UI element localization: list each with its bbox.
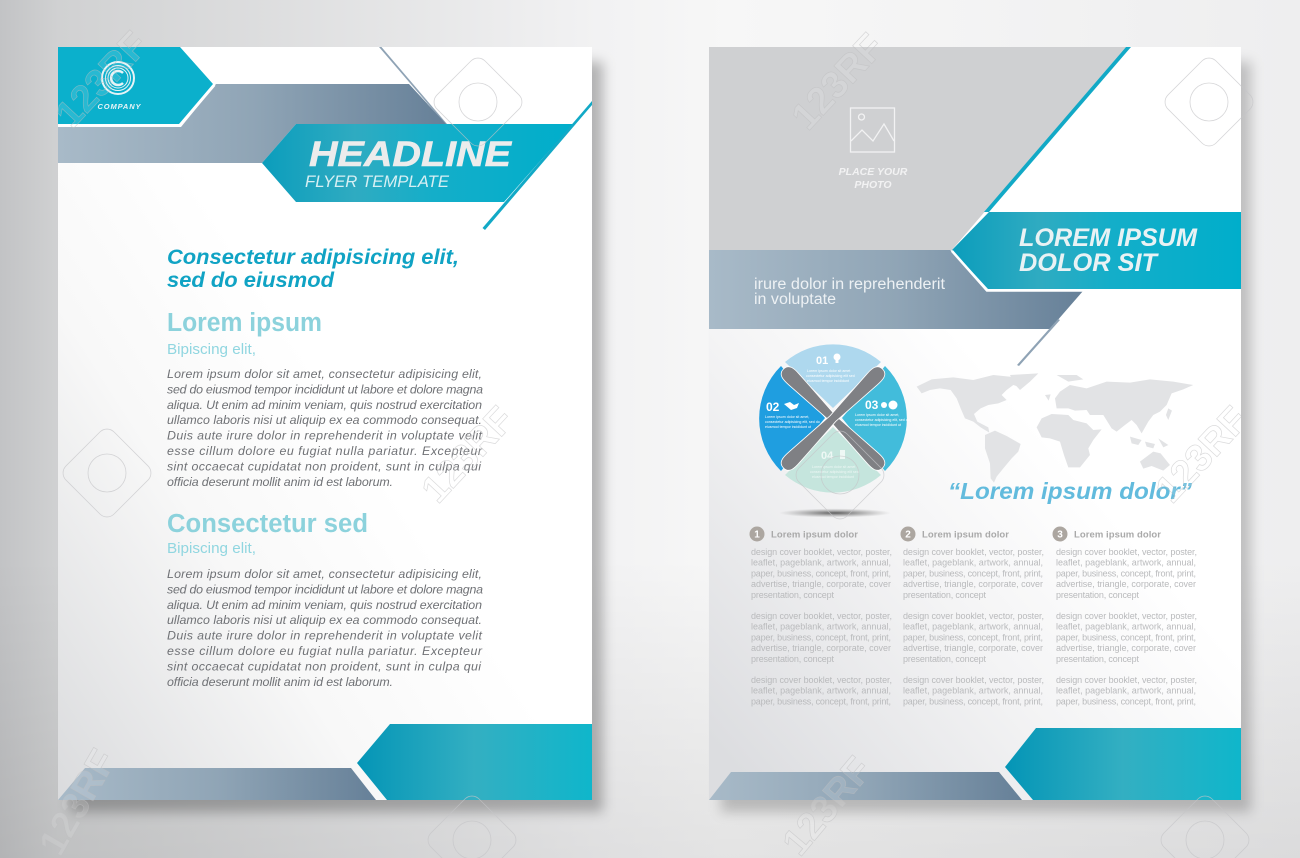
column text: leaflet, pageblank, artwork, annual, [1056, 622, 1196, 632]
number badge 3: 3 [1057, 530, 1063, 540]
segment 03: Lorem ipsum dolor sit amet, [855, 413, 899, 417]
panel: right flyer page [709, 47, 1241, 800]
subheadline: FLYER TEMPLATE [305, 173, 450, 191]
segment 02: Lorem ipsum dolor sit amet, [765, 415, 809, 419]
body text: aliqua. Ut enim ad minim veniam, quis nostrud exercitation [167, 598, 482, 612]
grey band with text [709, 250, 1083, 329]
number badge 2 [900, 526, 916, 542]
body text: esse cillum dolore eu fugiat nulla pariatur. Excepteur [167, 444, 483, 458]
column text: leaflet, pageblank, artwork, annual, [903, 622, 1043, 632]
teal ribbon [952, 212, 1241, 290]
column text: advertise, triangle, corporate, cover [1056, 643, 1196, 653]
segment 04: eiusmod tempor incididunt [812, 475, 854, 479]
photo caption: PHOTO [854, 179, 892, 191]
diagonal grey line [379, 47, 447, 124]
section: consectetur sed: Consectetur sed [167, 510, 368, 538]
column text: paper, business, concept, front, print, [1056, 632, 1196, 642]
column text: paper, business, concept, front, print, [751, 568, 891, 578]
section: lorem ipsum: Bipiscing elit, [167, 341, 256, 358]
photo placeholder area [709, 47, 1126, 251]
band text: irure dolor in reprehenderit [754, 276, 946, 293]
ribbon heading [1019, 224, 1198, 277]
column title: Lorem ipsum dolor [771, 530, 858, 540]
icon: gears [881, 400, 898, 410]
world map [917, 373, 1193, 483]
band text [754, 276, 946, 308]
circular infographic [759, 344, 910, 518]
segment 02: eiusmod tempor incididunt ut [765, 425, 811, 429]
heading: intro: sed do eiusmod [167, 268, 335, 292]
column text: leaflet, pageblank, artwork, annual, [903, 558, 1043, 568]
segment 04: Lorem ipsum dolor sit amet [812, 465, 855, 469]
column text: design cover booklet, vector, poster, [903, 547, 1044, 557]
column text: leaflet, pageblank, artwork, annual, [1056, 686, 1196, 696]
column text: paper, business, concept, front, print, [903, 632, 1043, 642]
column text: design cover booklet, vector, poster, [1056, 611, 1197, 621]
number badge 1: 1 [754, 530, 760, 540]
segment 03 [842, 366, 910, 471]
segment 02: consectetur adipisicing elit, sed do [765, 420, 820, 424]
watermarks: 123RF [48, 24, 156, 136]
quote: “Lorem ipsum dolor” [948, 478, 1192, 504]
icon: figure [840, 450, 845, 459]
footer teal block [1005, 728, 1241, 800]
column text: paper, business, concept, front, print, [751, 696, 891, 706]
segment 02 [759, 366, 825, 471]
column 1 [750, 526, 892, 706]
body text: ullamco laboris nisi ut aliquip ex ea commodo consequat. [167, 413, 482, 427]
heading: intro [167, 245, 459, 292]
column text: design cover booklet, vector, poster, [751, 547, 892, 557]
watermarks: 123RF [784, 26, 892, 138]
column text: paper, business, concept, front, print, [751, 632, 891, 642]
column text [903, 547, 1044, 706]
body text: Duis aute irure dolor in reprehenderit in voluptate velit [167, 429, 483, 443]
headline: HEADLINE [309, 135, 513, 174]
photo caption: PLACE YOUR [839, 166, 908, 178]
icon: image placeholder [850, 108, 894, 152]
column text: presentation, concept [903, 654, 986, 664]
diagonal grey line [1017, 319, 1060, 366]
column text: leaflet, pageblank, artwork, annual, [751, 622, 891, 632]
column text: design cover booklet, vector, poster, [1056, 675, 1197, 685]
body text [167, 367, 483, 489]
column text: advertise, triangle, corporate, cover [903, 643, 1043, 653]
segment 02: 02 [766, 400, 780, 414]
segment 04: 04 [821, 450, 834, 462]
column text: leaflet, pageblank, artwork, annual, [1056, 558, 1196, 568]
section: lorem ipsum [167, 309, 483, 489]
segment 04 [785, 427, 881, 493]
segment 04: consectetur adipisicing elit sed [810, 470, 859, 474]
number badge 2: 2 [905, 530, 911, 540]
body text: Lorem ipsum dolor sit amet, consectetur adipisicing elit, [167, 567, 482, 581]
column title: Lorem ipsum dolor [922, 530, 1009, 540]
column text: advertise, triangle, corporate, cover [903, 579, 1043, 589]
column text: advertise, triangle, corporate, cover [1056, 579, 1196, 589]
watermarks: 123RF [1148, 399, 1256, 511]
section: consectetur sed: Bipiscing elit, [167, 540, 256, 557]
column text: advertise, triangle, corporate, cover [751, 579, 891, 589]
ground shadow [779, 508, 891, 518]
body text: sed do eiusmod tempor incididunt ut labore et dolore magna [167, 582, 483, 596]
column text: design cover booklet, vector, poster, [903, 611, 1044, 621]
column text: paper, business, concept, front, print, [903, 696, 1043, 706]
column text [751, 547, 892, 706]
footer grey band [709, 772, 1022, 800]
headline ribbon [262, 124, 573, 202]
segment 01: consectetur adipisicing elit sed [806, 374, 855, 378]
page shadows [70, 62, 1251, 812]
icon: handshake [784, 402, 799, 410]
segment 01 [785, 344, 881, 408]
column 2 [900, 526, 1044, 706]
company label: COMPANY [98, 102, 141, 111]
segment 01: eiusmod tempor incididunt [807, 379, 849, 383]
panel: left flyer page [58, 47, 592, 800]
diagonal teal line [482, 101, 592, 230]
grey header band [58, 84, 446, 163]
column text: paper, business, concept, front, print, [903, 568, 1043, 578]
body text: sint occaecat cupidatat non proident, sunt in culpa qui [167, 459, 482, 473]
body text: Lorem ipsum dolor sit amet, consectetur adipisicing elit, [167, 367, 482, 381]
x-shaped divider [778, 364, 888, 473]
column text: design cover booklet, vector, poster, [751, 611, 892, 621]
column text: design cover booklet, vector, poster, [751, 675, 892, 685]
body text [167, 567, 483, 689]
segment 03: consectetur adipisicing elit, sed do [855, 418, 910, 422]
column 3 [1052, 526, 1197, 706]
body text: officia deserunt mollit anim id est laborum. [167, 475, 393, 489]
column text [1056, 547, 1197, 706]
column text: paper, business, concept, front, print, [1056, 568, 1196, 578]
photo caption [839, 166, 908, 191]
watermarks: 123RF [414, 399, 522, 511]
diagonal teal line [984, 47, 1131, 212]
number badge 3 [1052, 526, 1068, 542]
column text: presentation, concept [751, 654, 834, 664]
icon: company logo [102, 62, 134, 94]
segment 01: Lorem ipsum dolor sit amet [807, 369, 850, 373]
ribbon heading: LOREM IPSUM [1019, 224, 1198, 252]
segment 03: 03 [865, 398, 879, 412]
column text: presentation, concept [903, 590, 986, 600]
company tab [58, 47, 214, 126]
column text: presentation, concept [1056, 654, 1139, 664]
column text: design cover booklet, vector, poster, [903, 675, 1044, 685]
body text: ullamco laboris nisi ut aliquip ex ea commodo consequat. [167, 613, 482, 627]
body text: esse cillum dolore eu fugiat nulla pariatur. Excepteur [167, 644, 483, 658]
icon: bulb [834, 354, 840, 363]
band text: in voluptate [754, 291, 836, 308]
body text: sint occaecat cupidatat non proident, sunt in culpa qui [167, 659, 482, 673]
column text: leaflet, pageblank, artwork, annual, [751, 558, 891, 568]
column text: presentation, concept [751, 590, 834, 600]
number badge 1 [750, 526, 764, 542]
page sheet [58, 47, 592, 800]
body text: officia deserunt mollit anim id est laborum. [167, 675, 393, 689]
footer teal block [357, 724, 592, 800]
section: lorem ipsum: Lorem ipsum [167, 309, 322, 337]
column text: presentation, concept [1056, 590, 1139, 600]
body text: aliqua. Ut enim ad minim veniam, quis nostrud exercitation [167, 398, 482, 412]
segment 01: 01 [816, 355, 828, 367]
page sheet [709, 47, 1241, 800]
body text: Duis aute irure dolor in reprehenderit in voluptate velit [167, 629, 483, 643]
segment 03: eiusmod tempor incididunt ut [855, 423, 901, 427]
column text: design cover booklet, vector, poster, [1056, 547, 1197, 557]
section: consectetur sed [167, 510, 483, 689]
column title: Lorem ipsum dolor [1074, 530, 1161, 540]
footer grey band [58, 768, 376, 800]
column text: advertise, triangle, corporate, cover [751, 643, 891, 653]
heading: intro: Consectetur adipisicing elit, [167, 245, 459, 269]
column text: paper, business, concept, front, print, [1056, 696, 1196, 706]
column text: leaflet, pageblank, artwork, annual, [903, 686, 1043, 696]
column text: leaflet, pageblank, artwork, annual, [751, 686, 891, 696]
ribbon heading: DOLOR SIT [1019, 249, 1160, 277]
body text: sed do eiusmod tempor incididunt ut labore et dolore magna [167, 382, 483, 396]
